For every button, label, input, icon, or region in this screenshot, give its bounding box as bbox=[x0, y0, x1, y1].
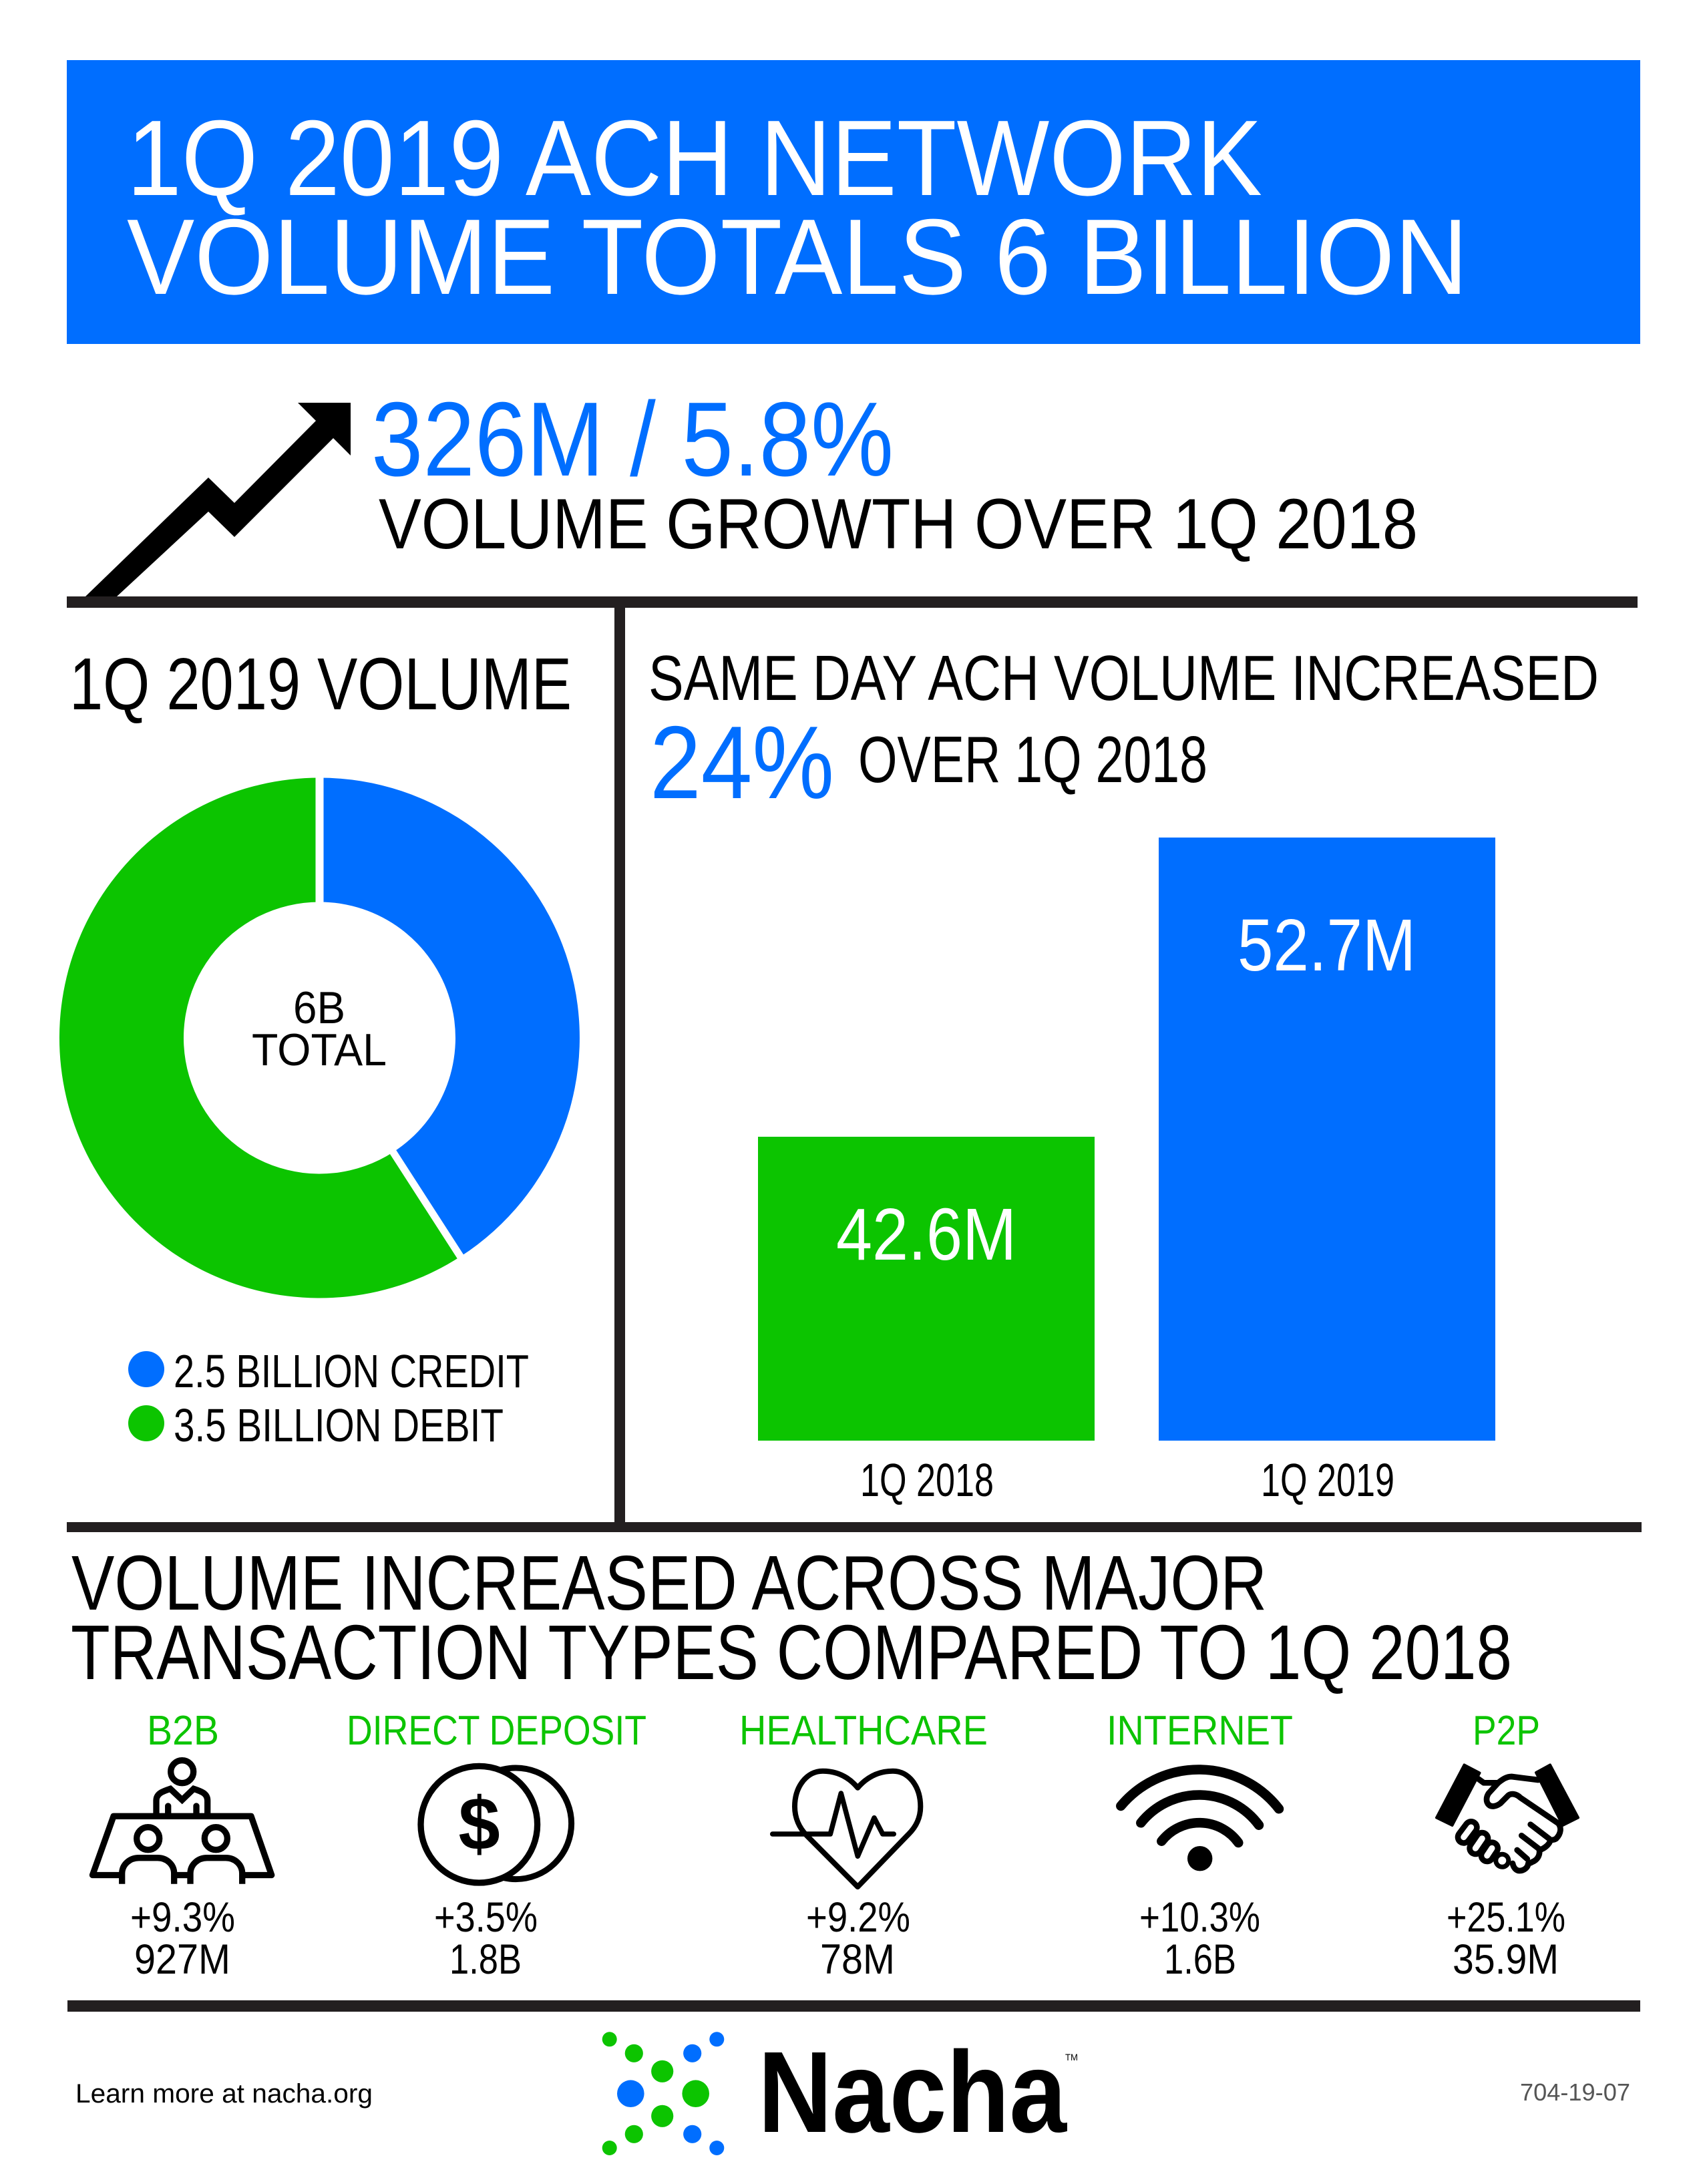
header banner bbox=[67, 60, 1640, 344]
item: healthcare: HEALTHCARE bbox=[739, 1708, 988, 1754]
logo mark bbox=[602, 2032, 724, 2155]
donut centre label bbox=[252, 982, 387, 1075]
item: P2P bbox=[1437, 1708, 1578, 1983]
item: B2B bbox=[92, 1708, 272, 1983]
icon: handshake bbox=[1437, 1765, 1578, 1871]
icon: rising arrow bbox=[85, 403, 351, 596]
growth section bbox=[85, 381, 1418, 596]
item: direct deposit bbox=[347, 1708, 646, 1983]
icon: coins bbox=[421, 1766, 572, 1883]
item: direct deposit: 1.8B bbox=[449, 1936, 522, 1983]
item: internet: INTERNET bbox=[1107, 1708, 1293, 1754]
panel: same day ACH bbox=[648, 643, 1599, 1506]
logo wordmark: Nacha bbox=[758, 2027, 1068, 2157]
heading: VOLUME INCREASED ACROSS MAJOR bbox=[71, 1539, 1267, 1626]
bar: 1Q 2018 bbox=[758, 1137, 1095, 1506]
item: healthcare: +9.2% bbox=[806, 1894, 910, 1941]
title bbox=[127, 98, 1468, 317]
footer bbox=[75, 2027, 1630, 2157]
item: internet: +10.3% bbox=[1139, 1894, 1260, 1941]
title: 1Q 2019 ACH NETWORK bbox=[127, 98, 1262, 218]
footer link text: Learn more at nacha.org bbox=[75, 2079, 373, 2109]
icon: wifi bbox=[1121, 1769, 1279, 1871]
heading bbox=[71, 1539, 1512, 1696]
item: healthcare: 78M bbox=[820, 1936, 895, 1983]
logo: Nacha bbox=[602, 2027, 1078, 2157]
item: P2P: 35.9M bbox=[1453, 1936, 1559, 1983]
bar: 1Q 2019 bbox=[1159, 838, 1495, 1506]
bar: 1Q 2018: 1Q 2018 bbox=[860, 1454, 994, 1506]
donut segment: credit bbox=[319, 777, 580, 1256]
item: P2P: +25.1% bbox=[1447, 1894, 1565, 1941]
item: direct deposit: DIRECT DEPOSIT bbox=[347, 1708, 646, 1754]
item: internet: 1.6B bbox=[1164, 1936, 1236, 1983]
bar chart bbox=[758, 838, 1495, 1506]
donut chart bbox=[59, 771, 580, 1298]
item: B2B: 927M bbox=[134, 1936, 230, 1983]
bar: 1Q 2019: 52.7M bbox=[1238, 904, 1416, 986]
icon: coins: $ bbox=[458, 1782, 500, 1865]
item: internet bbox=[1107, 1708, 1293, 1983]
panel: transaction types bbox=[71, 1539, 1578, 1983]
growth figure: 326M / 5.8% bbox=[371, 381, 894, 498]
heading: 1Q 2019 VOLUME bbox=[69, 643, 572, 725]
item: healthcare bbox=[739, 1708, 988, 1983]
donut centre label: 6B bbox=[293, 982, 345, 1033]
growth caption: VOLUME GROWTH OVER 1Q 2018 bbox=[379, 484, 1418, 564]
donut centre label: TOTAL bbox=[252, 1025, 387, 1075]
legend: 3.5 BILLION DEBIT bbox=[174, 1399, 504, 1451]
bar: 1Q 2019: 1Q 2019 bbox=[1261, 1454, 1394, 1506]
panel: 1Q 2019 volume bbox=[59, 643, 580, 1451]
comparison caption: OVER 1Q 2018 bbox=[858, 723, 1207, 796]
item: direct deposit: +3.5% bbox=[434, 1894, 538, 1941]
document code: 704-19-07 bbox=[1520, 2078, 1630, 2106]
bar: 1Q 2018: 42.6M bbox=[836, 1194, 1016, 1276]
percent figure: 24% bbox=[650, 705, 834, 820]
trademark: TM bbox=[1065, 2052, 1078, 2062]
title: VOLUME TOTALS 6 BILLION bbox=[127, 197, 1468, 317]
donut segment: debit bbox=[59, 777, 461, 1298]
icon: meeting table bbox=[92, 1761, 272, 1884]
item: B2B: +9.3% bbox=[130, 1894, 235, 1941]
icon: heart with pulse bbox=[773, 1771, 920, 1887]
legend: 2.5 BILLION CREDIT bbox=[174, 1345, 529, 1397]
legend bbox=[128, 1345, 529, 1451]
item: P2P: P2P bbox=[1473, 1708, 1540, 1754]
item: B2B: B2B bbox=[147, 1708, 219, 1754]
